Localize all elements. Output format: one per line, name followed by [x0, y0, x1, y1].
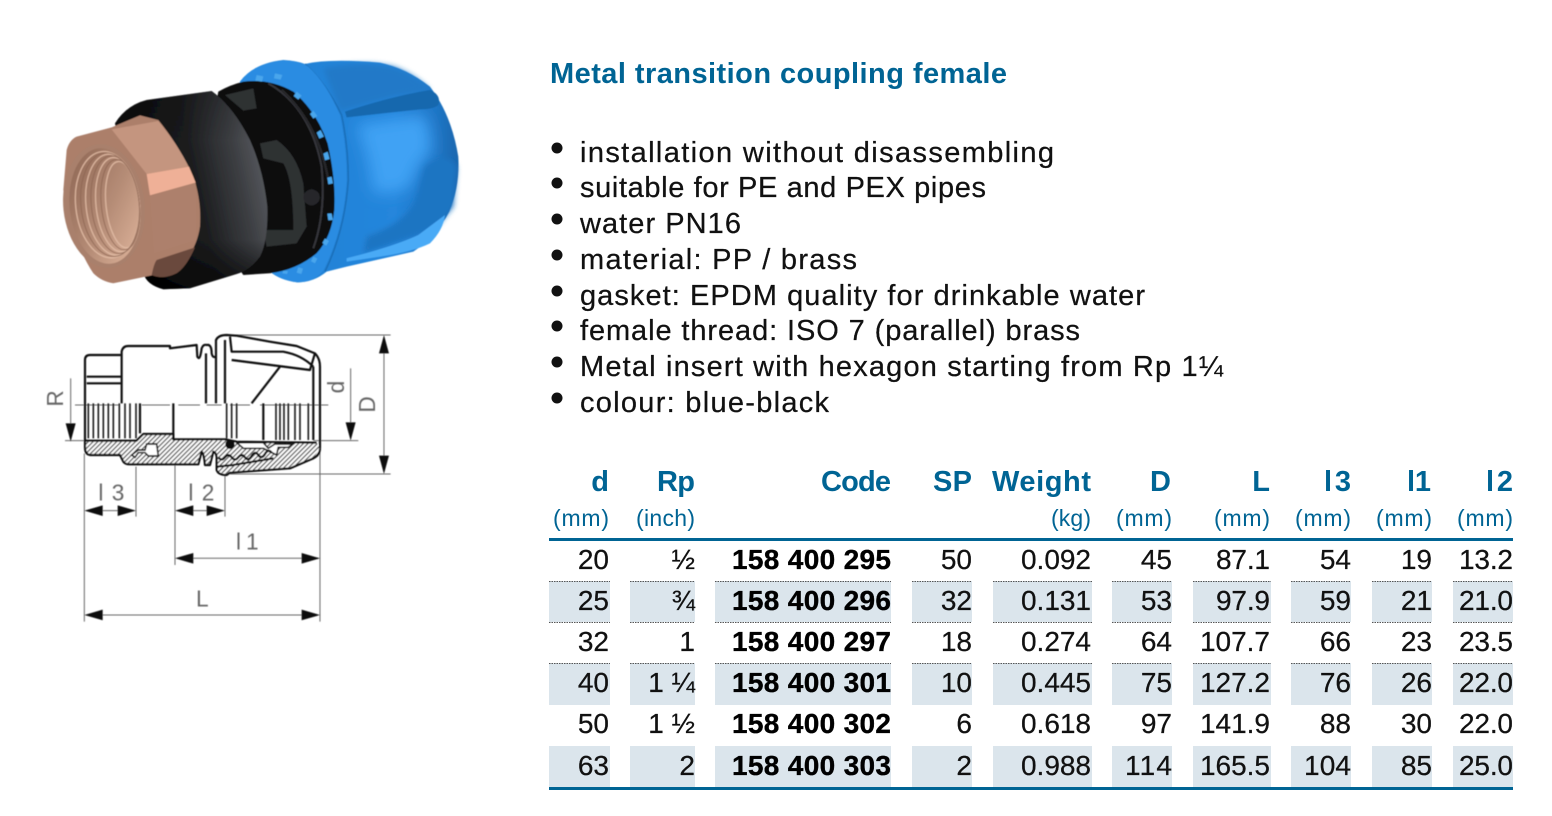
table header: D: [1150, 466, 1171, 498]
row d40: 75: [1141, 667, 1172, 698]
row d25: 53: [1141, 585, 1172, 616]
feature list: [552, 137, 1224, 419]
row d40: 40: [578, 667, 609, 698]
row d32: 23.5: [1459, 626, 1513, 657]
row d63: 158 400 303: [732, 750, 891, 781]
blue compression cap: [240, 60, 459, 282]
table header: L: [1252, 466, 1270, 498]
product illustration: coupling: [57, 60, 459, 289]
row d20: 50: [941, 544, 972, 575]
row d50: [578, 708, 1513, 739]
row d63: 104: [1304, 750, 1351, 781]
bullet: gasket: gasket: EPDM quality for drinkable water: [580, 280, 1145, 312]
white thread pockets: [132, 443, 293, 457]
bullet: colour: colour: blue-black: [580, 387, 830, 419]
row d63: 114: [1125, 750, 1172, 781]
row d32: 18: [941, 626, 972, 657]
row d32: 107.7: [1200, 626, 1270, 657]
row d63: [578, 750, 1513, 781]
row d25: 21: [1401, 585, 1432, 616]
row d50: 0.618: [1021, 708, 1091, 739]
row d50: 88: [1320, 708, 1351, 739]
row d20: 45: [1141, 544, 1172, 575]
row d50: 22.0: [1459, 708, 1513, 739]
row d20: 19: [1401, 544, 1432, 575]
bullet: thread: female thread: ISO 7 (parallel) brass: [580, 315, 1080, 347]
fitting outline: [85, 335, 320, 475]
bullet: pipes: suitable for PE and PEX pipes: [580, 172, 986, 204]
row d40: 158 400 301: [732, 667, 891, 698]
row d50: 97: [1141, 708, 1172, 739]
dimension label l2: l 2: [188, 480, 214, 506]
row d32: 158 400 297: [732, 626, 891, 657]
table header: d: [591, 466, 609, 498]
row d40: 127.2: [1200, 667, 1270, 698]
row d63: 85: [1401, 750, 1432, 781]
dimension label l1: l 1: [236, 528, 259, 554]
row d40: [578, 667, 1513, 698]
threaded bore: [57, 140, 151, 272]
row d32: 23: [1401, 626, 1432, 657]
table header: (mm): [1376, 505, 1432, 531]
row d20: 54: [1320, 544, 1351, 575]
row d63: 2: [679, 750, 695, 781]
row d32: [578, 626, 1513, 657]
table header: (mm): [1214, 505, 1270, 531]
title: Metal transition coupling female: [550, 58, 1007, 90]
row d20: ½: [672, 544, 695, 575]
dimension label d: d: [323, 381, 349, 393]
dimension label D: D: [354, 396, 380, 413]
row d40: 1 ¼: [648, 667, 696, 698]
sealing ring: [225, 440, 235, 449]
row d50: 6: [956, 708, 972, 739]
row d25: 0.131: [1021, 585, 1091, 616]
bullet: installation: installation without disassembling: [580, 137, 1054, 169]
dimension label L: L: [196, 586, 209, 612]
row d25: 97.9: [1216, 585, 1270, 616]
row d32: 1: [679, 626, 695, 657]
table header: (mm): [1116, 505, 1172, 531]
data table: [549, 466, 1513, 790]
row d20: 13.2: [1459, 544, 1513, 575]
row d32: 64: [1141, 626, 1172, 657]
table header: Rp: [657, 466, 695, 498]
bullet: insert: Metal insert with hexagon starting from Rp 1¼: [580, 351, 1224, 383]
brass hexagon fitting: [63, 115, 200, 283]
row d20: 20: [578, 544, 609, 575]
row d20: 0.092: [1021, 544, 1091, 575]
dimension lines: [65, 335, 391, 622]
row d40: 22.0: [1459, 667, 1513, 698]
row d25: 25: [578, 585, 609, 616]
table header: l3: [1324, 466, 1351, 498]
table header: l2: [1486, 466, 1513, 498]
hatched section: [85, 434, 320, 475]
table header: Weight: [992, 466, 1091, 498]
row d50: 50: [578, 708, 609, 739]
table header: (mm): [1457, 505, 1513, 531]
row d32: 32: [578, 626, 609, 657]
bullet: pressure: water PN16: [579, 208, 741, 240]
technical section drawing: [42, 335, 391, 622]
row d40: 76: [1320, 667, 1351, 698]
black insert ring: [197, 81, 335, 275]
table header: (kg): [1051, 505, 1091, 531]
black body nut: [115, 91, 267, 289]
row d25: [578, 585, 1513, 616]
dimension label R: R: [42, 390, 68, 407]
row d32: 0.274: [1021, 626, 1091, 657]
table header: (mm): [1295, 505, 1351, 531]
row d50: 30: [1401, 708, 1432, 739]
row d63: 63: [578, 750, 609, 781]
row d40: 26: [1401, 667, 1432, 698]
row d25: 32: [941, 585, 972, 616]
row d25: 158 400 296: [732, 585, 891, 616]
table header: Code: [821, 466, 891, 498]
table header: [553, 466, 1513, 531]
row d40: 10: [941, 667, 972, 698]
row d63: 165.5: [1200, 750, 1270, 781]
table header: SP: [933, 466, 972, 498]
row d25: 21.0: [1459, 585, 1513, 616]
dimension label l3: l 3: [98, 480, 124, 506]
bullet: material: material: PP / brass: [580, 244, 857, 276]
blue teeth around ring: [255, 73, 333, 274]
row d20: 87.1: [1216, 544, 1270, 575]
row d63: 25.0: [1459, 750, 1513, 781]
row d20: 158 400 295: [732, 544, 891, 575]
row d50: 141.9: [1200, 708, 1270, 739]
dimension arrows: [66, 335, 389, 620]
row d32: 66: [1320, 626, 1351, 657]
row d50: 1 ½: [648, 708, 695, 739]
row d20: [578, 544, 1513, 575]
row d63: 0.988: [1021, 750, 1091, 781]
table header: (mm): [553, 505, 609, 531]
row d50: 158 400 302: [732, 708, 891, 739]
table header: l1: [1407, 466, 1431, 498]
row d25: ¾: [672, 585, 696, 616]
row d40: 0.445: [1021, 667, 1091, 698]
row d63: 2: [956, 750, 972, 781]
shaded row backgrounds: [549, 581, 1513, 788]
row d25: 59: [1320, 585, 1351, 616]
thread lines: [88, 403, 308, 440]
table header: (inch): [636, 505, 695, 531]
